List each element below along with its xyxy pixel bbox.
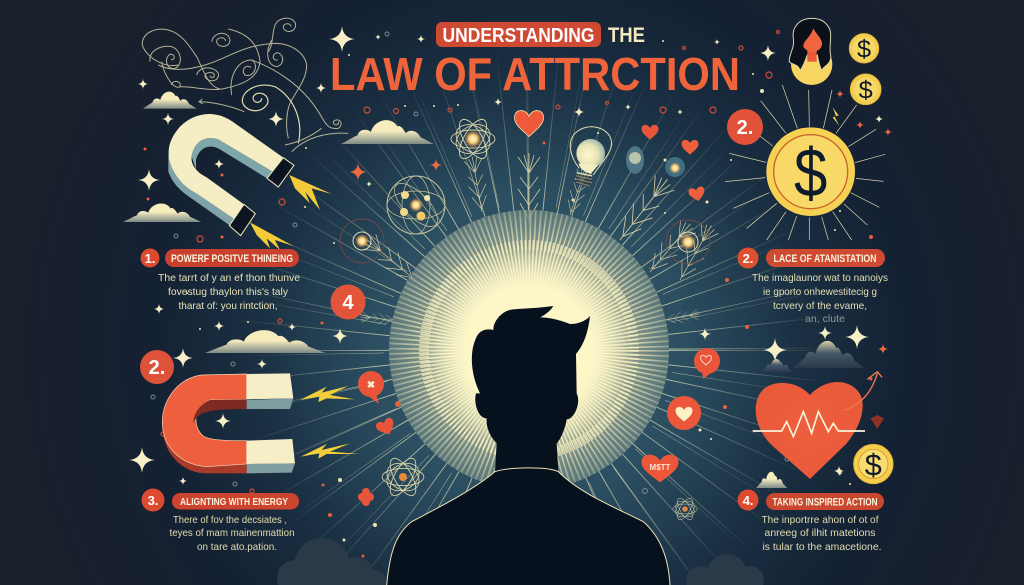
heading pill: ALIGNTING WITH ENERGY <box>180 496 288 508</box>
body text: is tular to the amacetione. <box>762 541 882 553</box>
heading pill: TAKING INSPIRED ACTION <box>772 496 878 508</box>
icon: coin <box>854 444 893 484</box>
icon: woman portrait <box>789 18 832 85</box>
body text <box>170 514 295 553</box>
icon: small lightning <box>833 107 839 126</box>
dark cloud bottom left <box>277 538 386 585</box>
icon: heart right 2 <box>682 140 698 155</box>
title <box>330 22 740 100</box>
number badge 4: 4. <box>743 493 753 508</box>
body text: fovestug thaylon this's taly <box>168 286 289 298</box>
icon: lower lightning <box>301 443 360 459</box>
number badge 3: 3. <box>148 493 158 508</box>
icon: glowing orb right <box>666 220 710 264</box>
title word: the: THE <box>608 24 645 47</box>
heading pill <box>766 249 885 267</box>
icon: bubble with heart <box>694 348 720 379</box>
icon: small coin 2: $ <box>859 77 873 105</box>
icon: atom top <box>451 115 495 163</box>
person silhouette <box>387 306 670 585</box>
icon: tilted heart <box>375 416 398 438</box>
icon: lower lightning <box>250 222 293 250</box>
icon: heart top <box>514 111 544 136</box>
icon: bubble with cross <box>358 371 384 404</box>
icon: cloud top centre <box>341 120 434 144</box>
body text <box>762 514 882 553</box>
icon: red horseshoe magnet <box>162 373 360 473</box>
icon: heart right 3 <box>688 186 706 203</box>
number badge 4 centre left <box>330 284 366 320</box>
icon: atom lower left <box>382 455 424 499</box>
background dots <box>144 30 873 558</box>
number badge 1: 1. <box>145 251 155 266</box>
number badge 1 <box>140 248 160 268</box>
icon: coin with rays: $ <box>794 136 827 212</box>
body text: anreeg of ilhit matetions <box>764 527 876 539</box>
icon: red clover <box>358 488 374 506</box>
icon: cream horseshoe magnet <box>168 114 332 250</box>
body text: The tarrt of y an ef thon thunve <box>158 272 300 284</box>
icon: upper lightning <box>300 386 355 402</box>
halo around head <box>389 210 669 490</box>
icon: rising arrow <box>843 372 882 411</box>
heading pill <box>172 493 299 510</box>
icon: heart right 1 <box>642 125 658 140</box>
icon: faint orb <box>665 157 685 177</box>
main title: LAW OF ATTRCTION <box>330 48 740 100</box>
icon: speech heart with label <box>642 455 678 482</box>
icon: small coin 1 <box>849 34 879 64</box>
icon: big heart with pulse <box>753 372 893 484</box>
body text <box>752 272 888 325</box>
body text: tharat of: you rintction, <box>178 300 278 312</box>
icon: coin with rays <box>725 18 885 240</box>
number badge 2 top right: 2. <box>737 117 753 139</box>
icon: cloud above red magnet <box>205 330 326 353</box>
number badge 4 <box>738 490 758 510</box>
dark cloud bottom right <box>686 554 764 585</box>
badge: 2 with heading and text, right top <box>738 248 888 325</box>
body text: There of fov the decsiates , <box>173 514 287 526</box>
icon: faint bulb <box>626 146 644 174</box>
icon: gem <box>871 415 884 429</box>
plant sprigs <box>360 153 720 325</box>
icon: circle with heart <box>667 396 701 430</box>
badge: 4 with heading and text, right bottom <box>738 490 884 553</box>
title badge: Understanding: UNDERSTANDING <box>442 25 594 47</box>
heading pill <box>165 249 299 267</box>
number badge 2 left <box>140 350 174 384</box>
icon: light bulb <box>570 127 612 187</box>
number badge 3 <box>142 488 164 512</box>
body text: teyes of mam mainenmattion <box>170 527 295 539</box>
icon: glowing orb left <box>340 219 384 263</box>
number badge 2 top right <box>727 109 763 145</box>
number badge 2 <box>738 248 758 268</box>
icon: bubble with cross: ✖ <box>367 380 375 391</box>
icon: cloud small right <box>760 359 794 372</box>
body text: The imaglaunor wat to nanoiys <box>752 272 888 284</box>
heading pill <box>766 493 884 510</box>
body text: The inportrre ahon of ot of <box>762 514 879 526</box>
number badge 2: 2. <box>743 251 753 266</box>
icon: small atom bottom right <box>673 496 697 522</box>
icon: small coin 1: $ <box>857 36 871 64</box>
body text: on tare ato.pation. <box>197 541 277 553</box>
icon: small coin 2 <box>850 74 881 105</box>
number badge 2 left: 2. <box>149 357 165 379</box>
orange sparkles <box>349 90 892 354</box>
body text: tcrvery of the evame, <box>773 300 867 312</box>
badge: 1 with heading and text, left top <box>140 248 300 312</box>
body text: an, clute <box>805 313 845 325</box>
body text <box>158 272 300 312</box>
icon: upper lightning <box>289 175 332 210</box>
icon: cloud small top left <box>143 92 197 109</box>
decorative swirls <box>142 18 348 152</box>
icon: cloud left middle <box>123 204 201 222</box>
icon: molecule network <box>387 176 445 234</box>
body text: ie gporto onhewestitecig g <box>763 286 877 298</box>
icon: cloud dark right <box>792 341 865 368</box>
icon: speech heart with label: M$TT <box>650 463 671 472</box>
icon: small cloud by heart bottom <box>756 472 787 488</box>
heading pill: POWERF POSITVE THINEING <box>171 253 293 265</box>
heading pill: LACE OF ATANISTATION <box>774 253 877 265</box>
sparkle stars <box>129 26 883 485</box>
badge: 3 with heading and text, left bottom <box>142 488 299 553</box>
number badge 4 centre left: 4 <box>342 292 354 314</box>
radiating light rays <box>309 130 749 570</box>
icon: coin: $ <box>865 448 882 482</box>
icon: atom nucleus <box>399 473 407 481</box>
